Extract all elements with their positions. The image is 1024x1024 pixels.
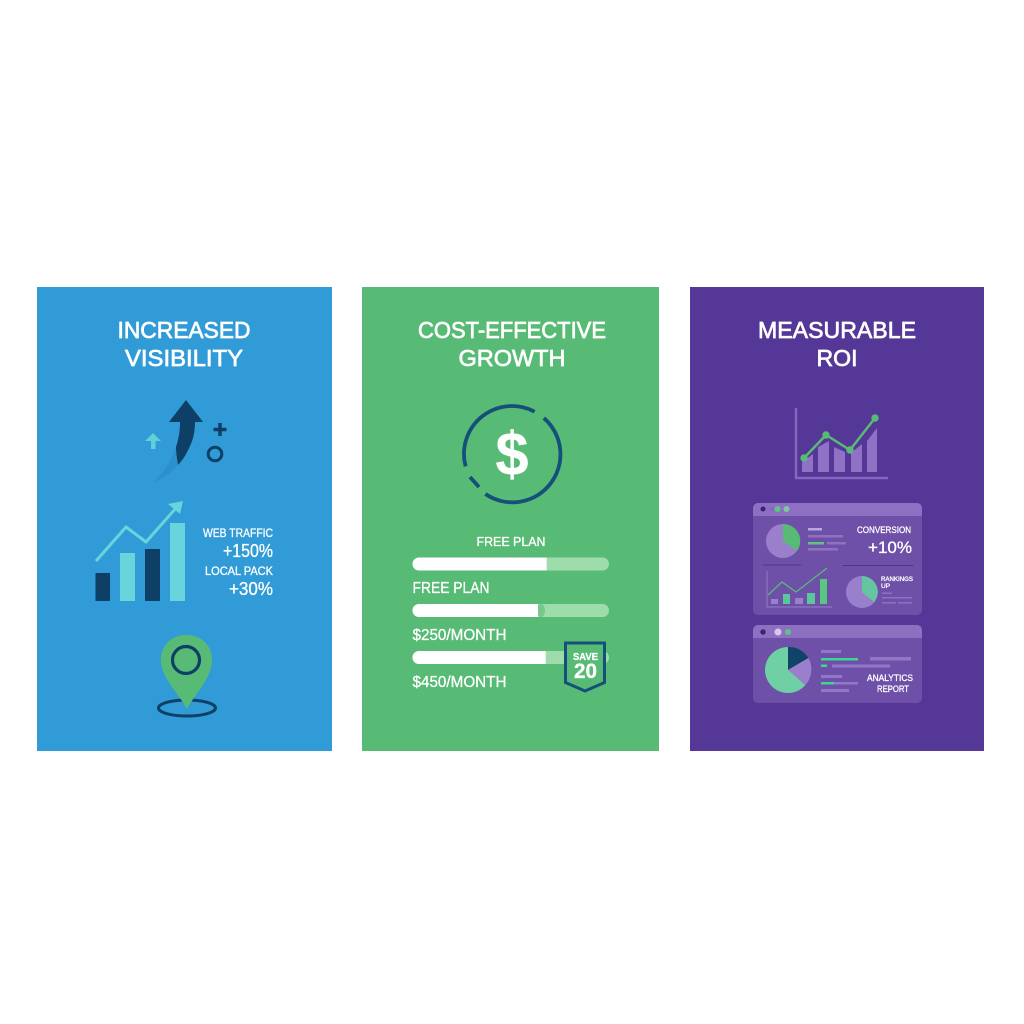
heading: measurable roi — [758, 317, 916, 371]
bar chart: growth — [96, 501, 185, 601]
panel: increased visibility — [37, 287, 332, 751]
progress bar 3 — [412, 651, 609, 664]
stats: web traffic and local pack: WEB TRAFFIC — [203, 528, 273, 540]
pie chart: rankings — [846, 576, 878, 608]
plan label: free plan centered: FREE PLAN — [476, 534, 546, 549]
panel: measurable roi — [690, 287, 984, 751]
icon: map pin — [158, 635, 216, 716]
icon: upward arrow — [145, 400, 226, 482]
heading: increased visibility: INCREASED — [118, 317, 250, 343]
badge: save 20: SAVE — [573, 652, 598, 663]
text lines: top legend — [808, 528, 846, 550]
label: analytics report — [867, 673, 913, 695]
heading: cost-effective growth — [418, 317, 606, 371]
heading: increased visibility — [118, 317, 250, 371]
stats: web traffic and local pack — [203, 528, 273, 599]
icon: roi chart — [796, 408, 888, 478]
stat: conversion +10% — [857, 525, 912, 557]
heading: cost-effective growth: GROWTH — [458, 345, 566, 371]
pie chart: top left — [766, 524, 800, 558]
plan label: free plan: FREE PLAN — [412, 580, 490, 597]
progress bar 1 — [412, 558, 609, 570]
badge: save 20: 20 — [574, 660, 597, 683]
plan label: $450 per month: $450/MONTH — [412, 674, 506, 691]
stats: web traffic and local pack: +150% — [223, 541, 273, 561]
progress bar 2 — [412, 604, 609, 617]
heading: increased visibility: VISIBILITY — [125, 345, 243, 371]
badge: save 20 — [566, 643, 604, 691]
pie chart: analytics — [765, 647, 811, 693]
stats: web traffic and local pack: LOCAL PACK — [205, 566, 273, 578]
icon: dollar ring: $ — [496, 420, 529, 488]
stat: conversion +10%: +10% — [868, 538, 912, 557]
heading: cost-effective growth: COST-EFFECTIVE — [418, 317, 606, 343]
dashboard window: conversion — [753, 503, 922, 615]
stat: rankings up: UP — [881, 583, 890, 590]
stats: web traffic and local pack: +30% — [229, 579, 273, 599]
label: analytics report: REPORT — [877, 684, 909, 695]
text lines: report — [821, 650, 911, 692]
stat: conversion +10%: CONVERSION — [857, 525, 911, 536]
stat: rankings up: RANKINGS — [881, 576, 914, 583]
plan label: $250 per month: $250/MONTH — [412, 627, 506, 644]
dashboard window: analytics report — [753, 625, 922, 703]
panel: cost-effective growth — [362, 287, 659, 751]
stat: rankings up — [881, 576, 914, 604]
mini chart: line and bars — [767, 568, 832, 607]
heading: measurable roi: ROI — [816, 345, 858, 371]
label: analytics report: ANALYTICS — [867, 673, 913, 684]
icon: dollar ring — [464, 406, 560, 502]
heading: measurable roi: MEASURABLE — [758, 317, 916, 343]
